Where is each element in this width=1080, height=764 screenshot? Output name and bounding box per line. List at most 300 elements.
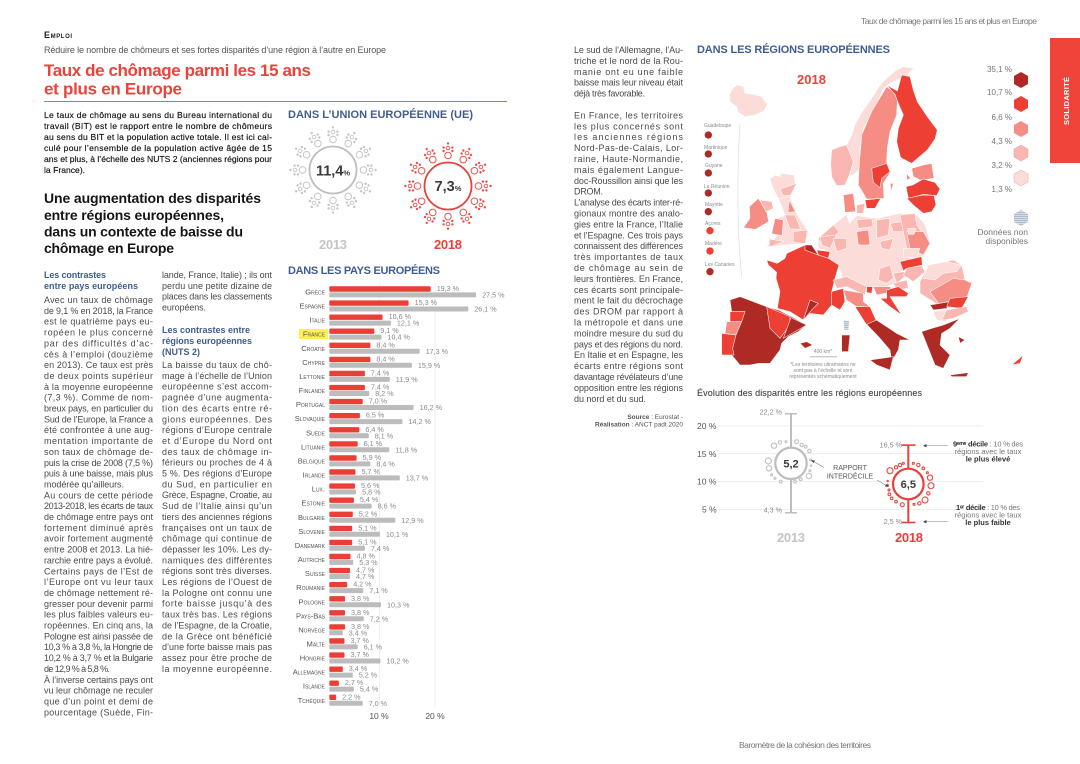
text column 3: mais également Langue-: [574, 165, 683, 175]
United Kingdom: [766, 173, 808, 247]
intro definition text: travail (BIT) est le rapport entre le nombre de chômeurs: [44, 121, 272, 131]
row: Espagne: [299, 298, 497, 314]
text column 3: connaissent des différences: [574, 241, 684, 251]
row: Allemagne: 3,4 %: [349, 664, 368, 673]
section label: Emploi: [44, 30, 72, 40]
text column 2: françaises ont un taux de: [162, 523, 272, 533]
text column 1: l’Europe ont vu leur taux: [44, 577, 154, 587]
row: Suisse: [305, 566, 375, 581]
text column 2: européenne s’est accom-: [162, 382, 272, 392]
Portugal: [722, 312, 745, 355]
map legend: 1,3 %: [992, 185, 1012, 194]
section tab: solidarité: SOLIDARITÉ: [1062, 77, 1071, 125]
text column 2: chômage qui continue de: [162, 534, 272, 544]
text column 3: les plus concernés sont: [574, 121, 683, 131]
row: Chypre: Chypre: [302, 358, 326, 367]
whisker 2018: 6,5: [901, 479, 916, 491]
text column 2: assez pour être proche de: [162, 653, 272, 663]
text column 3: L’analyse des écarts inter-ré-: [574, 198, 683, 208]
row: Suède: [306, 425, 394, 440]
text column 1: (7,3 %). Comme de nom-: [44, 393, 153, 403]
row: Malte: 6,1 %: [364, 642, 383, 652]
row: Roumanie: 7,1 %: [369, 586, 388, 595]
text column 2: du Sud, en particulier en: [162, 479, 272, 489]
row: Malte: Malte: [307, 640, 326, 648]
text column 2: Les régions de l’Ouest de: [162, 577, 272, 587]
row: Hongrie: 10,2 %: [386, 657, 409, 666]
text column 2: gions européennes. Des: [162, 414, 272, 424]
text column 1: puis à une baisse, mais plus: [44, 469, 154, 479]
row: Slovénie: 10,1 %: [386, 530, 409, 539]
text column 2: tion des écarts entre ré-: [162, 403, 272, 413]
text column 1: Au cours de cette période: [44, 490, 153, 500]
text column 1: fortement diminué après: [44, 523, 154, 533]
text column 1: en 2013). Ce taux est près: [44, 360, 154, 370]
map: regions of Europe: [705, 67, 1023, 377]
map year: 2018: [797, 72, 826, 87]
text column 1: rarchie entre pays a évolué.: [44, 555, 153, 565]
DROM labels: Les Canaries: [705, 262, 735, 268]
row: Croatie: [301, 340, 449, 356]
row: Allemagne: Allemagne: [293, 668, 326, 677]
row: Norvège: 3,8 %: [351, 622, 370, 631]
row: Danemark: Danemark: [295, 541, 326, 550]
whisker 2018: 2,5 %: [884, 517, 903, 526]
Central Europe: [818, 213, 930, 288]
text column 2: places dans les classements: [162, 292, 272, 302]
source credit: Réalisation : ANCT padt 2020: [595, 422, 683, 428]
subheading: contrastes entre régions: (NUTS 2): [162, 347, 200, 357]
row: Finlande: [299, 383, 394, 398]
row: Slovénie: Slovénie: [298, 527, 326, 536]
row: Estonie: Estonie: [301, 499, 326, 508]
text column 3: la métropole et dans une: [574, 318, 683, 328]
row: Irlande: [303, 467, 429, 482]
row: Autriche: 5,3 %: [359, 558, 378, 567]
callout: 1er décile: le plus faible: [965, 518, 1011, 527]
row: Suède: Suède: [306, 428, 326, 437]
text column 3: des DROM par rapport à: [574, 307, 683, 317]
heading: dans les régions européennes: DANS LES RÉGIONS EUROPÉENNES: [697, 43, 890, 56]
subheading: contrastes entre pays: Les contrastes: [44, 270, 106, 280]
map legend: 4,3 %: [992, 137, 1012, 146]
DROM labels: Martinique: [704, 145, 728, 151]
callout: 9e décile: 9ᵉᵐᵉ décile : 10 % des: [953, 440, 1023, 448]
callout: 1er décile: 1ᵉʳ décile : 10 % des: [956, 503, 1020, 512]
callout: 9e décile: le plus élevé: [966, 454, 1010, 464]
row: Suède: 8,1 %: [375, 431, 394, 440]
row: Italie: Italie: [309, 316, 326, 325]
Belgium north: [817, 250, 830, 258]
row: Pologne: Pologne: [299, 597, 326, 606]
whisker 2013: 4,3 %: [764, 506, 783, 514]
DROM labels: [704, 123, 735, 268]
text column 1: de 12,9 % à 5,8 %.: [44, 664, 110, 674]
map legend: Données non: [977, 227, 1028, 237]
map scale and note: sont pas à l’échelle et sont: [794, 368, 853, 374]
text column 3: gies entre la France, l’Italie: [574, 219, 683, 229]
intro definition text: la France).: [44, 165, 85, 175]
row: Allemagne: [293, 664, 378, 680]
text column 3: du nord et du sud.: [574, 394, 646, 404]
row: Pologne: 10,3 %: [387, 600, 410, 609]
row: Allemagne: 5,2 %: [359, 671, 378, 680]
map legend: disponibles: [985, 236, 1028, 246]
Iceland: [729, 85, 767, 117]
Norway: [831, 67, 914, 186]
row: Chypre: 8,4 %: [376, 354, 395, 363]
title: [44, 61, 311, 98]
text column 1: de deux points supérieur: [44, 371, 153, 381]
Italy: [832, 277, 910, 370]
text column 3: ces écarts sont principale-: [574, 285, 683, 295]
text column 1: pourcentage (Suède, Fin-: [44, 707, 153, 717]
row: Finlande: Finlande: [299, 386, 326, 395]
DROM markers: [705, 131, 714, 275]
text column 2: des taux de chômage in-: [162, 447, 272, 457]
row: Bulgarie: 5,2 %: [359, 509, 378, 518]
row: Grèce: 27,5 %: [482, 290, 505, 300]
callout: 1er décile: régions avec le taux: [955, 510, 1022, 520]
row: Slovénie: 5,1 %: [358, 523, 377, 532]
EU rate 2013 burst: [289, 126, 377, 252]
text column 3: pays et des régions du nord.: [574, 339, 683, 349]
row: Malte: 3,7 %: [350, 636, 369, 645]
row: Hongrie: Hongrie: [300, 654, 326, 663]
highlight: France: [299, 329, 328, 339]
Romania: [920, 260, 973, 305]
row: Italie: 10,6 %: [389, 312, 412, 321]
text column 2: mage à l’échelle de l’Union: [162, 371, 272, 381]
map legend: 10,7 %: [987, 88, 1012, 97]
whisker 2013: [760, 408, 812, 545]
text column 3: Nord-Pas-de-Calais, Lor-: [574, 143, 683, 153]
text column 3: En Italie et en Espagne, les: [574, 350, 684, 360]
map legend: 6,6 %: [992, 113, 1012, 122]
DROM labels: Madère: [705, 241, 722, 247]
Denmark: [843, 193, 865, 213]
text column 2: la Pologne ont connu une: [162, 588, 272, 598]
EU rate 2013 burst: 2013: [319, 237, 347, 252]
row: Chypre: [302, 354, 441, 370]
text column 2: lande, France, Italie) ; ils ont: [162, 270, 272, 280]
row: Luxembourg: Lux.: [312, 485, 325, 494]
section tab: solidarité: [1050, 38, 1080, 163]
text column 2: dépasser les 10%. Les dy-: [162, 544, 272, 554]
text column 1: 10,3 % à 3,8 %, la Hongrie de: [44, 642, 153, 652]
DROM labels: Guyane: [705, 163, 723, 169]
bar axis labels: [369, 711, 445, 721]
text column 1: de chômage entre pays ont: [44, 512, 153, 522]
row: Belgique: 8,4 %: [376, 460, 395, 468]
row: Lituanie: 6,1 %: [364, 439, 383, 448]
row: Hongrie: 3,7 %: [350, 650, 369, 659]
text column 3: écarts entre régions sont: [574, 361, 683, 371]
text column 2: pagnée d’une augmenta-: [162, 393, 272, 403]
section heading: chômage en Europe: [44, 240, 174, 256]
EU rate 2018 burst: [404, 142, 492, 252]
DROM labels: Açores: [705, 221, 721, 227]
section heading: entre régions européennes,: [44, 207, 224, 223]
row: Slovénie: [298, 523, 409, 539]
Croatia and Slovenia: [867, 280, 908, 315]
row: Autriche: Autriche: [298, 555, 326, 564]
Spain: [730, 297, 813, 365]
row: Slovaquie: [295, 411, 431, 426]
row: Lettonie: 7,4 %: [371, 368, 390, 378]
text column 1: cès à l’emploi (douzième: [44, 349, 153, 359]
text column 2: et d’Europe du Nord ont: [162, 436, 272, 446]
section heading: [44, 190, 261, 256]
EU rate 2013 burst: 11,4%: [316, 164, 350, 180]
callout: rapport interdécile: RAPPORT: [833, 465, 868, 472]
row: Roumanie: [296, 580, 388, 595]
text column 3: triche et le nord de la Rou-: [574, 56, 683, 66]
row: Espagne: 15,3 %: [415, 298, 438, 307]
text column 2: namiques des différentes: [162, 555, 272, 565]
chart: interdecile disparities: [697, 408, 1023, 545]
text column 2: de l’Espagne, de la Croatie,: [162, 620, 272, 630]
callout: 1er décile: [923, 503, 1022, 527]
heading: dans les pays européens: DANS LES PAYS EUROPÉENS: [288, 264, 440, 277]
row: Malte: [307, 636, 383, 652]
subheading: contrastes entre régions: Les contrastes entre: [162, 325, 250, 335]
map scale and note: 400 km*: [814, 349, 832, 355]
row: France: [303, 326, 410, 342]
row: Finlande: 8,2 %: [375, 389, 394, 398]
text column 1: 2013-2018, les écarts de taux: [44, 501, 154, 511]
page header: running title: Taux de chômage parmi les 15 ans et plus en Europe: [861, 16, 1037, 26]
text column 3: raine, Haute-Normandie,: [574, 154, 683, 164]
row: Grèce: 19,3 %: [437, 284, 460, 293]
row: Suisse: 4,7 %: [356, 572, 375, 581]
text column 2: de la Grèce ont bénéficié: [162, 631, 272, 641]
row: Estonie: 8,6 %: [378, 502, 397, 511]
text column 3: doc-Roussillon ainsi que les: [574, 176, 684, 186]
subheading: contrastes entre régions: [162, 325, 252, 357]
callout: 9e décile: [923, 440, 1023, 464]
row: Danemark: [295, 537, 390, 553]
subheading: contrastes entre pays: entre pays européens: [44, 281, 138, 291]
bar axis labels: 20 %: [425, 711, 445, 721]
row: Autriche: 4,8 %: [356, 552, 375, 560]
title: Taux de chômage parmi les 15 ans: [44, 61, 311, 80]
row: France: 9,1 %: [380, 326, 399, 335]
intro definition text: ans et plus, à l’échelle des NUTS 2 (anciennes régions pour: [44, 154, 272, 164]
row: Suisse: Suisse: [305, 569, 326, 578]
intro definition text: culé pour l’ensemble de la population active âgée de 15: [44, 143, 272, 153]
row: Bulgarie: Bulgarie: [298, 513, 326, 522]
text column 1: 10,2 % à 3,7 % et la Bulgarie: [44, 653, 153, 663]
row: Lituanie: Lituanie: [301, 442, 326, 451]
row: Pays-Bas: 3,8 %: [351, 608, 370, 617]
row: Espagne: Espagne: [299, 302, 326, 311]
text column 3: déjà très favorable.: [574, 89, 645, 99]
text column 1: les plus faibles valeurs eu-: [44, 610, 153, 620]
text column 3: En France, les territoires: [574, 110, 684, 120]
row: Suède: 6,4 %: [365, 425, 384, 434]
text column 1: À l’inverse certains pays ont: [44, 675, 153, 685]
row: Belgique: Belgique: [298, 456, 326, 466]
row: Norvège: Norvège: [298, 625, 326, 634]
row: Luxembourg: 5,8 %: [362, 488, 381, 497]
row: Luxembourg: 5,6 %: [361, 481, 380, 490]
row: Islande: Islande: [303, 682, 326, 691]
text column 2: La baisse du taux de chô-: [162, 360, 272, 370]
text column 3: gionaux montre des analo-: [574, 208, 683, 218]
row: Islande: 2,7 %: [345, 678, 364, 687]
row: Norvège: 3,4 %: [349, 628, 368, 637]
row: Belgique: [298, 453, 395, 468]
text column 1: de 9,1 % en 2018, la France: [44, 306, 153, 316]
intro definition text: [44, 110, 272, 175]
text column 1: par des difficultés d’ac-: [44, 338, 153, 348]
Greece: [922, 307, 968, 377]
row: Grèce: [305, 284, 505, 300]
text column 2: [162, 270, 272, 674]
row: Norvège: [298, 622, 370, 637]
source credit: Source : Eurostat -: [627, 414, 683, 421]
text column 2: 5 %. Des régions d’Europe: [162, 468, 272, 478]
row: Slovaquie: 14,2 %: [408, 417, 431, 426]
text column 1: son taux de chômage de-: [44, 447, 153, 457]
text column 2: tiers des anciennes régions: [162, 512, 272, 522]
map legend: [977, 65, 1028, 246]
row: Slovaquie: 6,5 %: [366, 411, 385, 420]
row: Tchéquie: 7,0 %: [369, 699, 388, 708]
text column 1: Certains pays de l’Est de: [44, 566, 153, 576]
text column 1: mentation importante de: [44, 436, 153, 446]
row: Belgique: 5,9 %: [363, 453, 382, 462]
text column 1: puis la crise de 2008 (7,5 %): [44, 458, 153, 468]
row: Pays-Bas: Pays-Bas: [296, 611, 326, 620]
Sweden: [858, 87, 897, 208]
row: Croatie: 17,3 %: [426, 347, 449, 356]
row: Slovaquie: Slovaquie: [295, 414, 326, 423]
text column 1: été confrontée à une aug-: [44, 425, 153, 435]
map scale and note: *Les territoires ultramarins ne: [790, 362, 856, 368]
text column 1: breux pays, en particulier du: [44, 404, 153, 414]
Cyprus: [1012, 355, 1023, 365]
text column 1: Avec un taux de chômage: [44, 295, 153, 305]
page footer: Baromètre de la cohésion des territoires: [739, 740, 871, 750]
text column 2: taux très bas. Les régions: [162, 610, 272, 620]
row: Pays-Bas: [296, 608, 389, 623]
row: Italie: 12,1 %: [397, 319, 420, 328]
heading: évolution des disparités: Évolution des disparités entre les régions européennes: [697, 388, 922, 398]
callout: rapport interdécile: [811, 460, 889, 487]
row: Roumanie: Roumanie: [296, 583, 326, 592]
text column 2: d’une forte baisse mais pas: [162, 642, 272, 652]
whisker 2013: 22,2 %: [760, 408, 783, 416]
row: Lettonie: 11,9 %: [396, 375, 418, 384]
text column 3: opposition entre les régions: [574, 383, 684, 393]
title: et plus en Europe: [44, 80, 182, 98]
text column 1: avoir fortement augmenté: [44, 534, 153, 544]
axis labels: [697, 421, 717, 514]
text column 3: moindre mesure du sud du: [574, 328, 683, 338]
text column 3: davantage révélateurs d’une: [574, 372, 683, 382]
DROM labels: La Réunion: [704, 184, 730, 190]
row: Irlande: 5,7 %: [362, 467, 380, 476]
row: Grèce: Grèce: [305, 288, 326, 296]
text column 1: Pologne est ainsi passée de: [44, 631, 153, 641]
row: Italie: [309, 312, 420, 328]
text column 2: la moyenne européenne.: [162, 664, 272, 674]
text column 3: manie ont eu une faible: [574, 67, 683, 77]
text column 3: et l’Espagne. Ces trois pays: [574, 230, 684, 240]
row: Pologne: 3,8 %: [351, 594, 370, 603]
whisker 2013: 2013: [777, 530, 805, 545]
text column 2: Sud de l’Italie ainsi qu’un: [162, 501, 272, 511]
Ireland: [743, 198, 773, 229]
subtitle: Réduire le nombre de chômeurs et ses fortes disparités d’une région à l’autre en Europe: [44, 45, 386, 55]
row: Portugal: 16,2 %: [420, 403, 443, 412]
text column 3: de chômage au sein de: [574, 263, 683, 273]
text column 2: forte baisse jusqu’à des: [162, 599, 272, 609]
text column 1: ropéen le plus concerné: [44, 328, 153, 338]
row: Estonie: 5,4 %: [360, 495, 379, 504]
text column 2: perdu une petite dizaine de: [162, 281, 272, 291]
text column 1: de chômage nettement ré-: [44, 588, 153, 598]
text column 2: européens.: [162, 303, 206, 313]
text column 2: régions sont très diverses.: [162, 566, 272, 576]
row: Islande: 5,4 %: [360, 685, 379, 694]
heading: dans l'union européenne: DANS L’UNION EUROPÉENNE (UE): [288, 108, 473, 121]
subheading: contrastes entre régions: régions européennes: [162, 336, 252, 346]
row: Suisse: 4,7 %: [356, 566, 375, 575]
text column 1: Sud de l’Europe, la France a: [44, 414, 153, 424]
text column 3: baisse mais leur niveau était: [574, 78, 683, 88]
text column 3: très importantes de taux: [574, 252, 684, 262]
DROM labels: Mayotte: [705, 202, 723, 208]
row: Portugal: Portugal: [296, 400, 325, 409]
axis labels: 10 %: [697, 476, 717, 486]
EU rate 2018 burst: 7,3%: [435, 179, 462, 195]
subheading: contrastes entre pays: [44, 270, 138, 291]
whisker 2013: 5,2: [783, 458, 799, 470]
Bulgaria: [930, 297, 968, 310]
text column 1: vu leur chômage ne reculer: [44, 686, 153, 696]
Baltic states: [906, 163, 940, 213]
source credit: [595, 414, 683, 428]
DROM separator: [738, 123, 742, 277]
text column 3: leurs frontières. En France,: [574, 274, 683, 284]
row: Lituanie: 11,8 %: [395, 445, 418, 454]
row: Lettonie: Lettonie: [299, 372, 326, 381]
row: Croatie: Croatie: [301, 344, 326, 353]
Slovakia: [900, 257, 922, 271]
axis labels: 5 %: [702, 504, 717, 514]
DROM labels: Guadeloupe: [704, 123, 731, 129]
row: Portugal: [296, 397, 443, 412]
map legend: 35,1 %: [987, 65, 1012, 74]
text column 3: [574, 45, 684, 404]
row: Hongrie: [300, 650, 409, 666]
row: Lituanie: [301, 439, 418, 454]
row: Lettonie: [299, 368, 418, 384]
intro definition text: Le taux de chômage au sens du Bureau international du: [44, 110, 272, 120]
row: Portugal: 7,0 %: [369, 397, 388, 406]
map legend: 3,2 %: [992, 161, 1012, 170]
row: Chypre: 15,9 %: [418, 361, 441, 370]
axis labels: 15 %: [697, 449, 717, 459]
callout: 9e décile: régions avec le taux: [955, 447, 1022, 456]
text column 1: à la moyenne européenne: [44, 382, 153, 392]
map scale and note: [789, 349, 857, 380]
text column 3: Le sud de l’Allemagne, l’Au-: [574, 45, 683, 55]
text column 2: Grèce, Espagne, Croatie, au: [162, 490, 272, 500]
